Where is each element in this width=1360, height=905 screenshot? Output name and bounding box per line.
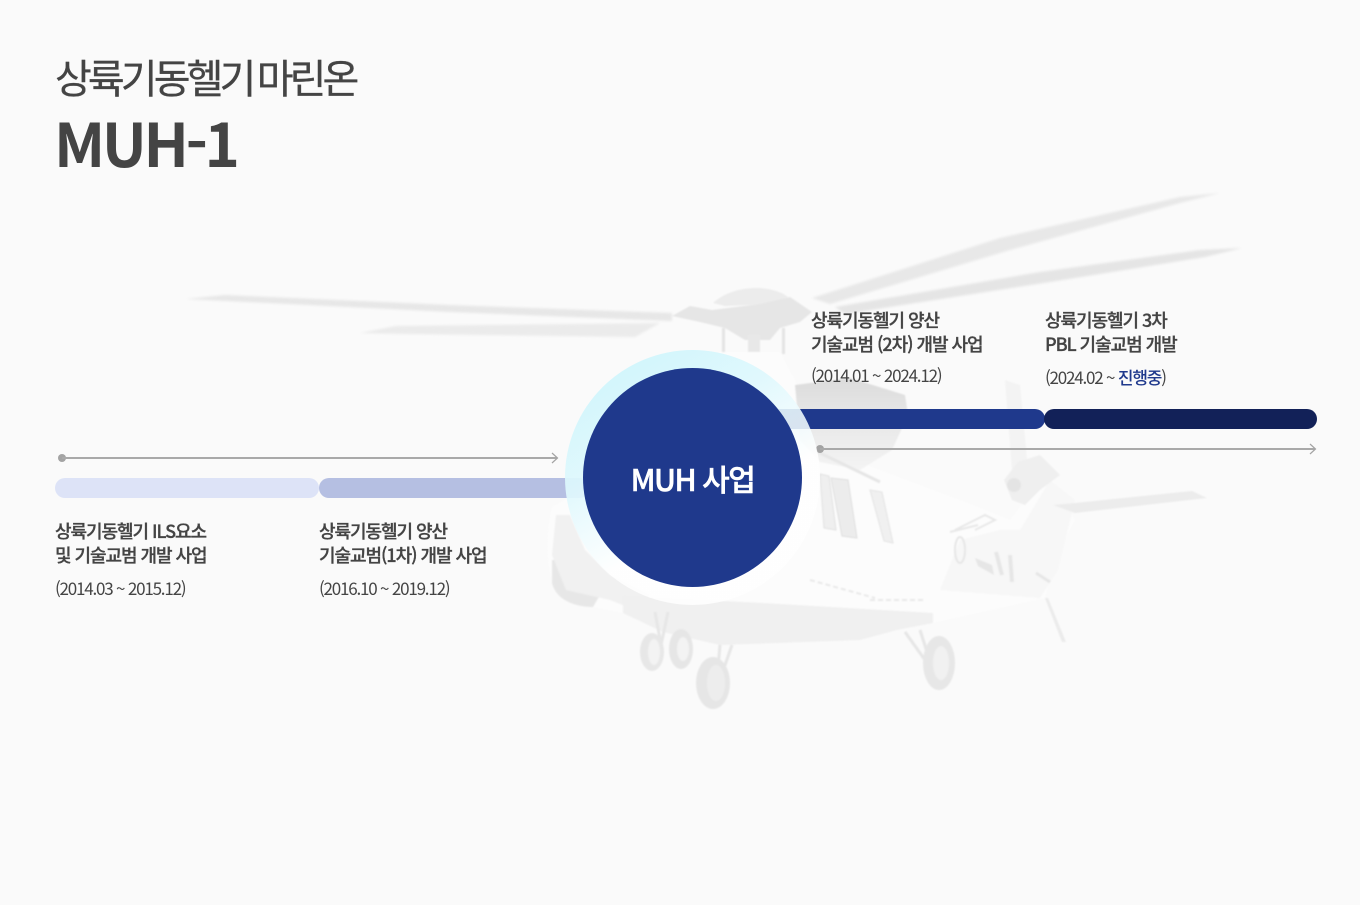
tail skid <box>1045 598 1066 642</box>
project title <box>811 307 982 357</box>
project title: PBL 기술교범 개발 <box>1045 331 1177 357</box>
text block: production tech 1st project <box>319 518 486 600</box>
text block: ILS project <box>55 518 207 600</box>
text block: production tech 2nd project <box>811 307 982 387</box>
fuselage <box>548 352 1207 709</box>
inner circle <box>583 368 802 587</box>
project title <box>1045 307 1178 357</box>
project title: 상륙기동헬기 양산 <box>811 307 939 333</box>
bar: production tech 2nd <box>770 409 1045 429</box>
project dates: (2024.02 ~ 진행중) <box>1045 364 1166 389</box>
project title: 기술교범(1차) 개발 사업 <box>319 542 486 568</box>
project title: 상륙기동헬기 ILS요소 <box>55 518 206 544</box>
wheels <box>640 633 664 671</box>
circle label: MUH 사업 <box>631 456 754 500</box>
project title <box>55 518 207 568</box>
project title <box>319 518 486 568</box>
central circle: MUH 사업 <box>565 350 820 605</box>
landing gear <box>655 612 928 668</box>
project dates: (2016.10 ~ 2019.12) <box>319 575 449 600</box>
project title: 기술교범 (2차) 개발 사업 <box>811 331 982 357</box>
rotor hub <box>672 288 812 354</box>
engine <box>795 378 908 470</box>
tail rotor <box>1005 380 1028 470</box>
arrow: right timeline <box>816 444 1316 454</box>
cabin windows <box>820 474 836 530</box>
bar: PBL tech <box>1044 409 1317 429</box>
bar: ILS 2014-2015 <box>55 478 319 498</box>
tail boom <box>940 480 1075 598</box>
nose <box>552 560 600 607</box>
rotor blades <box>186 193 1242 337</box>
text block: PBL project <box>1045 307 1178 389</box>
tail stabilizer <box>1053 491 1207 513</box>
title: MUH-1: MUH-1 <box>54 98 237 185</box>
project title: 상륙기동헬기 양산 <box>319 518 447 544</box>
project title: 상륙기동헬기 3차 <box>1045 307 1167 333</box>
project title: 및 기술교범 개발 사업 <box>55 542 207 568</box>
arrow: left timeline <box>58 452 558 464</box>
project dates: (2014.01 ~ 2024.12) <box>811 362 941 387</box>
marine markings <box>955 537 965 563</box>
project dates: (2014.03 ~ 2015.12) <box>55 575 185 600</box>
bar: production tech 1st <box>319 478 589 498</box>
title: 상륙기동헬기 마린온: 상륙기동헬기 마린온 <box>55 47 355 105</box>
belly <box>623 596 933 645</box>
